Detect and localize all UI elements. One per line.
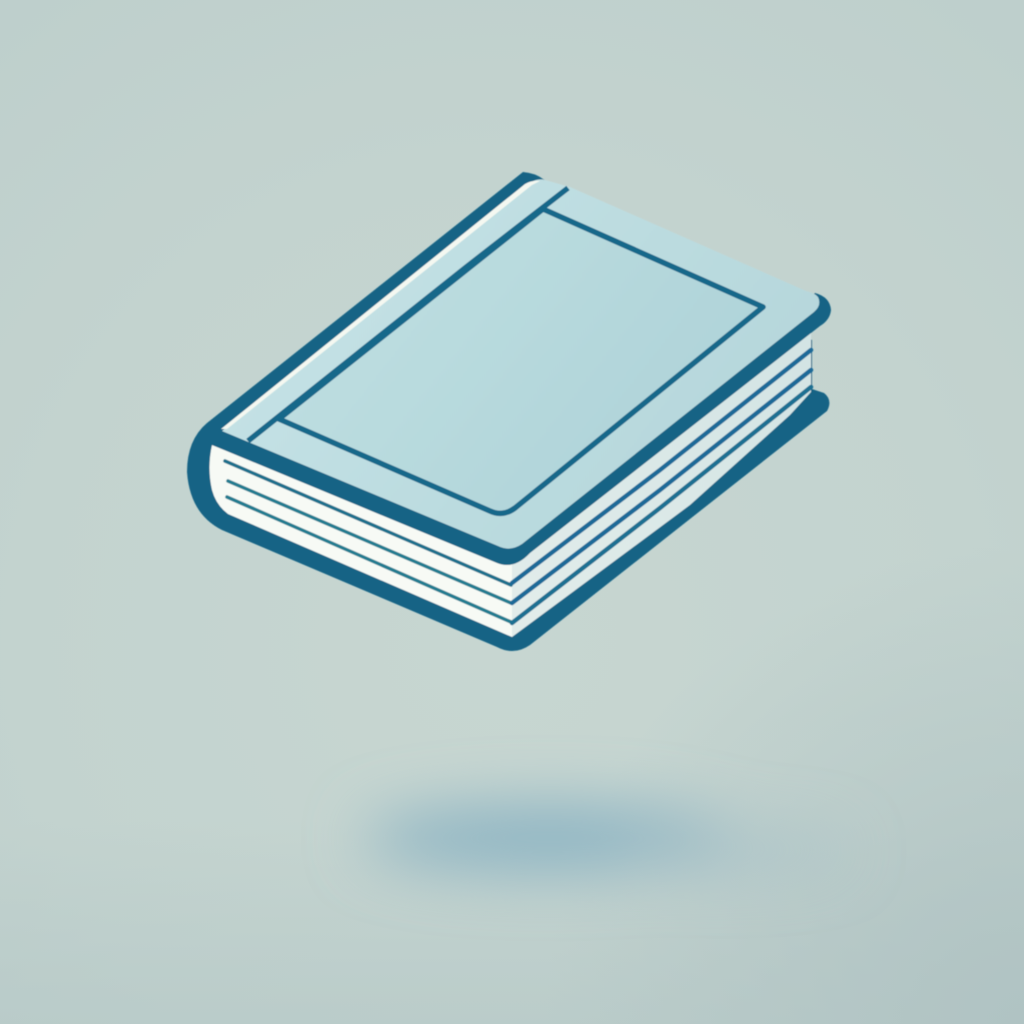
inset cover panel [279, 209, 763, 513]
top cover edge [207, 293, 831, 565]
spine highlight [221, 181, 540, 429]
hinge line [248, 188, 568, 441]
front page lines [225, 461, 511, 622]
ground shadow [363, 806, 850, 870]
side page lines [512, 350, 811, 623]
book [187, 172, 831, 651]
back cover and spine silhouette [187, 172, 829, 651]
top cover surface [222, 179, 819, 549]
side page block [512, 330, 811, 637]
front page block [210, 445, 512, 637]
